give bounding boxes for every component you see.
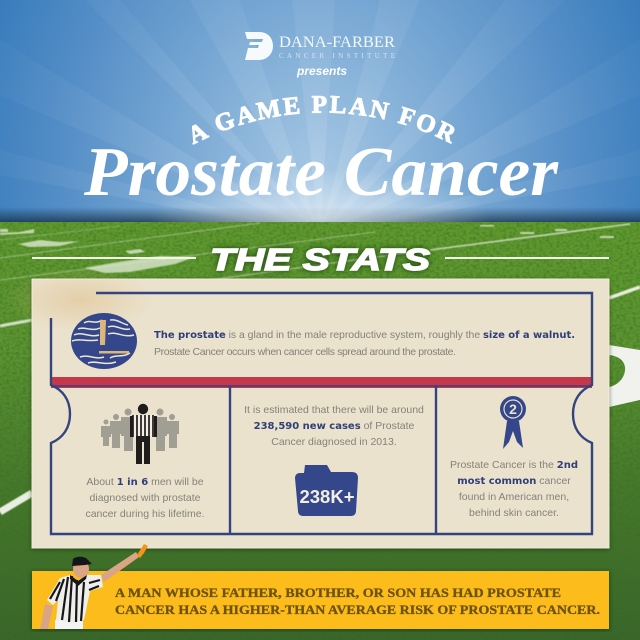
main title: Prostate Cancer <box>83 134 559 211</box>
referee <box>40 544 148 629</box>
referee trousers <box>55 620 83 629</box>
referee shirt <box>47 575 103 623</box>
field yard numbers <box>0 225 614 273</box>
text: second most common: behind skin cancer. <box>469 507 559 519</box>
panel: risk callout <box>32 571 609 629</box>
text: second most common: Prostate Cancer is the 2nd <box>450 459 578 471</box>
field background <box>0 222 640 640</box>
text: new cases estimate: Cancer diagnosed in 2013. <box>271 436 397 448</box>
text: diagnosed line: diagnosed with prostate <box>90 492 201 504</box>
text: prostate definition: The prostate is a gland in the male reproductive system, roughly the size of a walnut. <box>154 329 575 341</box>
panel: risk callout: CANCER HAS A HIGHER-THAN AVERAGE RISK OF PROSTATE CANCER. <box>115 602 600 617</box>
icon: folder 238K+: 238K+ <box>299 486 355 507</box>
sky background <box>0 0 640 268</box>
text: new cases estimate <box>244 404 424 448</box>
logo <box>245 32 396 60</box>
referee cap <box>72 557 92 566</box>
logo subtitle: CANCER INSTITUTE <box>279 52 395 60</box>
text: prostate definition <box>154 329 575 358</box>
ticket frame <box>51 293 592 534</box>
text: prostate definition: Prostate Cancer occurs when cancer cells spread around the prostate. <box>154 346 456 358</box>
logo wordmark: DANA-FARBER <box>279 34 396 51</box>
text: second most common: most common cancer <box>457 475 571 487</box>
presents: presents <box>296 64 347 78</box>
field yard lines <box>0 223 640 512</box>
text: new cases estimate: 238,590 new cases of Prostate <box>254 420 415 432</box>
icon: walnut <box>71 313 137 369</box>
red band <box>51 377 592 388</box>
arched title: A GAME PLAN FOR <box>192 96 454 145</box>
icon: Dana-Farber shield <box>245 32 273 60</box>
referee raised arm <box>101 552 139 582</box>
referee lower arm <box>40 604 53 629</box>
text: new cases estimate: It is estimated that there will be around <box>244 404 424 416</box>
icon: one in six men <box>101 404 179 464</box>
panel: stats ticket <box>5 268 609 548</box>
text: 1 in 6: About 1 in 6 men will be <box>86 476 204 488</box>
text: second most common <box>450 459 578 519</box>
field number shape <box>609 345 640 407</box>
icon: second place ribbon <box>500 396 526 449</box>
icon: second place ribbon: 2 <box>509 401 517 417</box>
penalty flag <box>137 544 148 558</box>
text: second most common: found in American men, <box>459 491 569 503</box>
text: lifetime line: cancer during his lifetime. <box>85 508 205 520</box>
icon: folder 238K+ <box>295 465 358 516</box>
section heading: the stats: THE STATS <box>210 242 430 277</box>
callout text: A MAN WHOSE FATHER, BROTHER, OR SON HAS HAD PROSTATE <box>115 585 561 600</box>
referee head <box>73 560 89 578</box>
